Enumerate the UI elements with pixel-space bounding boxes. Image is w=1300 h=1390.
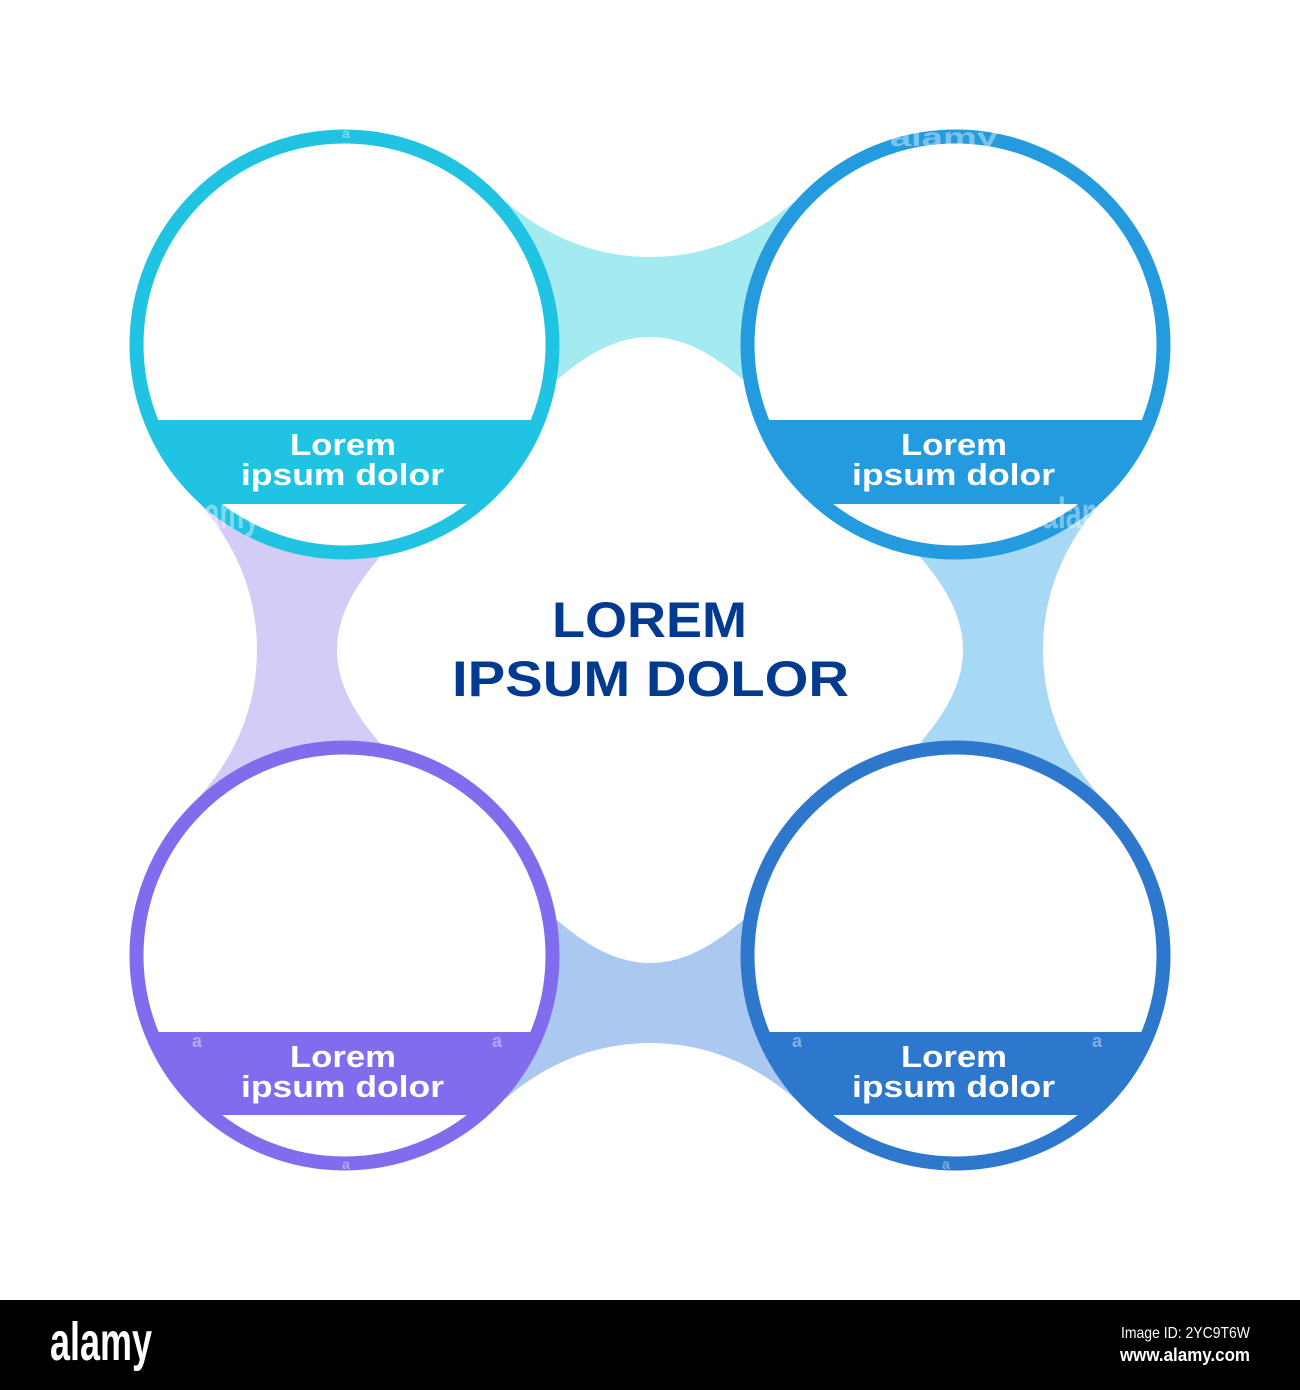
title: IPSUM DOLOR — [452, 651, 849, 707]
connector: top cyan — [505, 201, 795, 380]
watermark fragments: a — [942, 1156, 950, 1172]
connector: bottom blue — [505, 920, 795, 1099]
footer logo: alamy — [50, 1312, 152, 1372]
connector: left purple — [201, 505, 380, 795]
label band: top-right — [769, 420, 1142, 504]
watermark fragments: a — [342, 1156, 350, 1172]
panel: bottom-left circle — [130, 748, 560, 1164]
footer url: www.alamy.com — [1119, 1345, 1250, 1365]
watermark fragments: amy — [204, 489, 260, 538]
label text: top-right: Lorem — [901, 427, 1007, 462]
connector: right blue — [920, 505, 1099, 795]
watermark fragments: a — [1092, 1031, 1103, 1051]
watermark fragments: alam — [1042, 489, 1107, 538]
label text: top-left: ipsum dolor — [241, 457, 444, 492]
panel: top-left circle — [130, 136, 560, 552]
footer bar — [0, 1300, 1300, 1390]
label band: bottom-right — [770, 1032, 1142, 1115]
label text: bottom-left: Lorem — [290, 1039, 396, 1074]
label text: bottom-right: ipsum dolor — [852, 1069, 1055, 1104]
label text: bottom-right: Lorem — [901, 1039, 1007, 1074]
panel: bottom-right circle — [741, 748, 1171, 1164]
label text: bottom-left: ipsum dolor — [241, 1069, 444, 1104]
watermark fragments: a — [192, 1031, 203, 1051]
watermark fragments: alamy — [890, 122, 999, 152]
panel: top-right circle — [741, 136, 1171, 552]
watermark fragments: a — [342, 125, 350, 141]
label band: bottom-left — [158, 1032, 530, 1115]
label text: top-right: ipsum dolor — [852, 457, 1055, 492]
footer image id: Image ID: 2YC9T6W — [1121, 1325, 1251, 1342]
title: LOREM — [552, 592, 747, 648]
watermark fragments: a — [792, 1031, 803, 1051]
watermark fragments: a — [492, 1031, 503, 1051]
watermark fragments — [192, 122, 1107, 1172]
label band: top-left — [158, 420, 531, 504]
label text: top-left: Lorem — [290, 427, 396, 462]
